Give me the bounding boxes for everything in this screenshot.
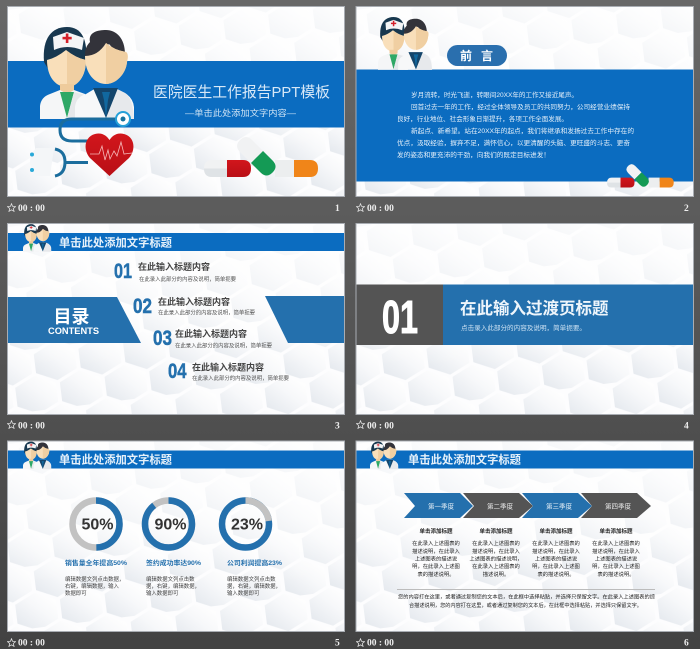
metric 1 text — [65, 558, 127, 597]
footer slide 4 — [356, 421, 689, 432]
column 1 text: 表的描述说明。 — [417, 570, 455, 578]
footer slide 3: 3 — [335, 422, 340, 432]
slide 6: quarterly process — [356, 441, 693, 631]
contents item 01: 在此录入此部分的内容及说明，简单扼要 — [139, 275, 237, 283]
contents item 03: 在此录入此部分的内容及说明，简单扼要 — [175, 342, 273, 350]
header title: 单击此处添加文字标题 — [59, 452, 172, 466]
contents item 02: 在此输入标题内容 — [158, 296, 230, 307]
contents item 03 — [153, 327, 273, 350]
metric 3 text: 输入数据即可 — [227, 589, 260, 597]
footer slide 5 — [7, 638, 340, 648]
metric 2 text: 签约成功率达90% — [146, 558, 201, 567]
slide 4: section divider — [356, 224, 693, 414]
metric 2 text: 编辑数据文列点击数 — [146, 575, 195, 583]
summary text: 合描述说明，您的内容打在这里，或者通过复制您的文本后，在此框中选择粘贴，并选择只保留文字。 — [409, 601, 642, 609]
section title block: 在此输入过渡页标题 — [460, 298, 609, 318]
icon: doctors — [23, 224, 51, 252]
header title: 单击此处添加文字标题 — [59, 236, 172, 250]
metric 2 text: 输入数据即可 — [146, 589, 179, 597]
column 1 text: 上述图表的描述说 — [415, 554, 458, 562]
foreword text: 岁月流转，时光飞逝，转眼间20XX年的工作又接近尾声。 — [411, 90, 578, 99]
metric 2 text: 据，右键，编辑数据， — [146, 582, 200, 590]
column 4 text: 表的描述说明。 — [597, 570, 635, 578]
column 1 text: 单击添加标题 — [419, 527, 453, 535]
summary text: 您的内容打在这里，或者通过复制您的文本后，在此框中选择粘贴，并选择只保留文字。在此录入上述图表的综 — [398, 592, 656, 600]
contents item 04: 在此录入此部分的内容及说明，简单扼要 — [192, 374, 290, 382]
foreword text: 回首过去一年的工作，经过全体领导及员工的共同努力，公司经营业绩保持 — [411, 102, 631, 111]
contents item 04 — [168, 360, 290, 383]
section title block: 点击录入此部分的内容及说明，简单扼要。 — [461, 323, 586, 332]
footer slide 2 — [356, 204, 689, 214]
footer slide 1: 00 : 00 — [18, 204, 45, 214]
column 1 text: 在此录入上述图表的 — [412, 539, 460, 547]
metric 3 text: 据，右键，编辑数据， — [227, 582, 281, 590]
metric 3 text: 公司利润提高23% — [227, 558, 282, 567]
column 4 text: 描述说明，在此录入 — [592, 547, 641, 555]
chevron Q2: 第二季度 — [487, 502, 514, 510]
foreword text: 良好，行业地位、社会形象日渐提升，各项工作全面发展。 — [397, 114, 568, 123]
contents item 02: 02 — [133, 295, 152, 318]
column 1 text — [412, 527, 461, 578]
footer slide 5: 00 : 00 — [18, 638, 45, 648]
footer slide 6: 00 : 00 — [367, 638, 394, 648]
slide 2 background — [356, 7, 693, 197]
slide 2: foreword — [356, 7, 693, 197]
contents item 02: 在此录入此部分的内容及说明，简单扼要 — [158, 308, 256, 316]
slide 5: donut charts — [8, 441, 345, 631]
donut 23% — [222, 500, 269, 548]
donut 90% — [145, 500, 192, 548]
contents item 04: 04 — [168, 360, 187, 383]
donut 23%: 23% — [231, 516, 263, 534]
footer slide 6 — [356, 638, 689, 648]
contents item 01 — [114, 260, 237, 283]
footer slide 5: 5 — [335, 638, 340, 648]
slide 3 background — [8, 224, 345, 414]
column 3 text: 描述说明，在此录入 — [532, 547, 581, 555]
contents item 03: 03 — [153, 327, 172, 350]
column 2 text: 在此录入上述图表的 — [472, 562, 520, 570]
metric 1 text: 销售量全年提高50% — [65, 558, 127, 567]
metric 1 text: 编辑数据文列点击数据， — [65, 575, 124, 583]
foreword blue panel — [356, 70, 693, 182]
contents item 01: 在此输入标题内容 — [138, 261, 210, 272]
metric 1 text: 数据即可 — [65, 589, 87, 597]
metric 1 text: 右键，编辑数据，输入 — [65, 582, 120, 590]
column 3 text: 上述图表的描述说 — [535, 554, 578, 562]
column 2 text: 描述说明。 — [483, 570, 509, 578]
chevron Q4: 第四季度 — [605, 502, 632, 510]
metric 2 text — [146, 558, 201, 597]
icon: doctors — [23, 442, 51, 469]
column 4 text: 明，在此录入上述图 — [592, 562, 640, 570]
header band — [8, 233, 344, 251]
slide 3: contents — [8, 224, 345, 414]
icon: stethoscope — [55, 119, 123, 176]
column 4 text: 上述图表的描述说 — [595, 554, 638, 562]
contents left banner: 目录 — [54, 307, 90, 327]
contents item 04: 在此输入标题内容 — [192, 362, 264, 372]
foreword text: 优点，汲取经验，摒弃不足，满怀信心，以更清醒的头脑、更旺盛的斗志、更奋 — [397, 138, 631, 147]
contents item 01: 01 — [114, 260, 132, 283]
donut 90%: 90% — [154, 516, 187, 534]
foreword text: 发的姿态和更充沛的干劲，向我们的既定目标进发！ — [397, 150, 550, 159]
column 3 text: 明，在此录入上述图 — [532, 562, 580, 570]
column 4 text: 在此录入上述图表的 — [592, 539, 640, 547]
column 2 text: 在此录入上述图表的 — [472, 539, 520, 547]
donut 50%: 50% — [81, 516, 114, 534]
footer slide 1 — [7, 204, 340, 214]
contents left banner: CONTENTS — [48, 326, 99, 337]
column 1 text: 明，在此录入上述图 — [412, 562, 460, 570]
icon: heart — [86, 133, 133, 176]
icon: pills — [204, 134, 318, 179]
section title block — [443, 284, 693, 345]
header band — [8, 450, 344, 468]
metric 3 text: 编辑数据文列点击数 — [227, 575, 276, 583]
footer slide 2: 2 — [684, 204, 689, 214]
column 3 text: 表的描述说明。 — [537, 570, 575, 578]
icon: pills — [607, 162, 674, 188]
footer slide 1: 1 — [335, 204, 340, 214]
icon: doctors — [378, 17, 432, 70]
slide 4 background — [356, 224, 693, 414]
foreword heading: 前言 — [460, 48, 502, 63]
column 1 text: 描述说明，在此录入 — [412, 547, 461, 555]
column 3 text: 在此录入上述图表的 — [532, 539, 580, 547]
chevron Q1: 第一季度 — [428, 502, 454, 510]
slide 5 background — [8, 441, 345, 631]
cover blue band — [8, 61, 344, 128]
contents right banner — [265, 296, 344, 343]
chevron Q4 — [581, 493, 651, 518]
footer slide 4: 4 — [684, 422, 689, 432]
icon: chest piece — [116, 112, 130, 126]
chevron Q3 — [522, 493, 592, 518]
header title: 单击此处添加文字标题 — [408, 452, 521, 466]
section number block: 01 — [382, 291, 418, 343]
contents item 03: 在此输入标题内容 — [175, 328, 247, 339]
chevron Q2 — [463, 493, 533, 518]
contents left banner — [8, 297, 141, 343]
chevron Q1 — [404, 493, 473, 518]
column 2 text — [470, 527, 522, 578]
header band — [356, 450, 693, 468]
footer slide 2: 00 : 00 — [367, 204, 394, 214]
donut 50% — [72, 500, 120, 548]
column 2 text: 上述图表的描述说明， — [470, 554, 522, 562]
cover title: 医院医生工作报告PPT模板 — [153, 83, 330, 101]
icon: ear pieces — [30, 148, 54, 176]
slide 1 background — [8, 7, 345, 197]
summary text — [398, 592, 656, 609]
contents item 02 — [133, 295, 256, 318]
column 3 text: 单击添加标题 — [539, 527, 573, 535]
footer slide 4: 00 : 00 — [367, 422, 394, 432]
foreword heading — [447, 45, 507, 66]
footer slide 3 — [7, 421, 340, 432]
section number block — [356, 284, 443, 345]
column 2 text: 描述说明，在此录入 — [472, 547, 521, 555]
column 3 text — [532, 527, 581, 578]
icon: doctors — [40, 27, 134, 119]
foreword text: 新起点、新希望。站在20XX年的起点，我们将继承和发扬过去工作中存在的 — [411, 126, 635, 135]
column 4 text: 单击添加标题 — [599, 527, 633, 535]
cover subtitle: —单击此处添加文字内容— — [185, 108, 297, 118]
metric 3 text — [227, 558, 282, 597]
chevron Q3: 第三季度 — [546, 502, 572, 510]
foreword text — [397, 90, 635, 159]
column 4 text — [592, 527, 641, 578]
footer slide 6: 6 — [684, 638, 689, 648]
icon: doctors — [370, 442, 398, 469]
footer slide 3: 00 : 00 — [18, 422, 45, 432]
slide 6 background — [356, 441, 693, 631]
slide 1: cover — [8, 7, 345, 197]
column 2 text: 单击添加标题 — [479, 527, 513, 535]
